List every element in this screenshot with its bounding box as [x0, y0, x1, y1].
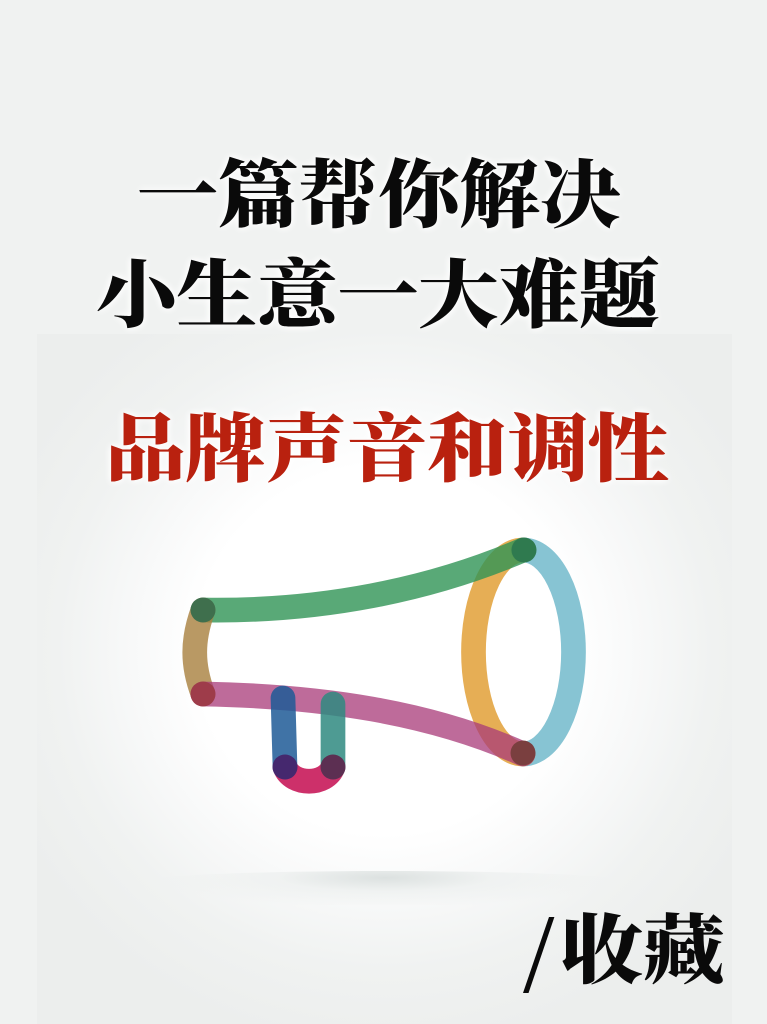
handle right side: [321, 704, 345, 767]
red subtitle: 品牌声音和调性: [105, 409, 669, 492]
megaphone bottom edge: [203, 694, 523, 754]
megaphone back edge: [195, 610, 203, 694]
title line 1: 一篇帮你解决: [137, 155, 620, 238]
save label: [523, 892, 725, 1017]
megaphone joints: [190, 538, 536, 780]
ground shadow: [145, 871, 625, 905]
slash: /: [523, 892, 554, 1017]
megaphone top edge: [203, 550, 523, 610]
title line 2: 小生意一大难题: [96, 255, 660, 338]
megaphone mouth, outer rim: [523, 550, 574, 754]
megaphone mouth, inner rim: [474, 550, 523, 754]
handle left side: [283, 698, 285, 767]
background panel: [37, 334, 732, 1024]
save text: 收藏: [561, 910, 725, 994]
handle bottom: [285, 767, 333, 781]
